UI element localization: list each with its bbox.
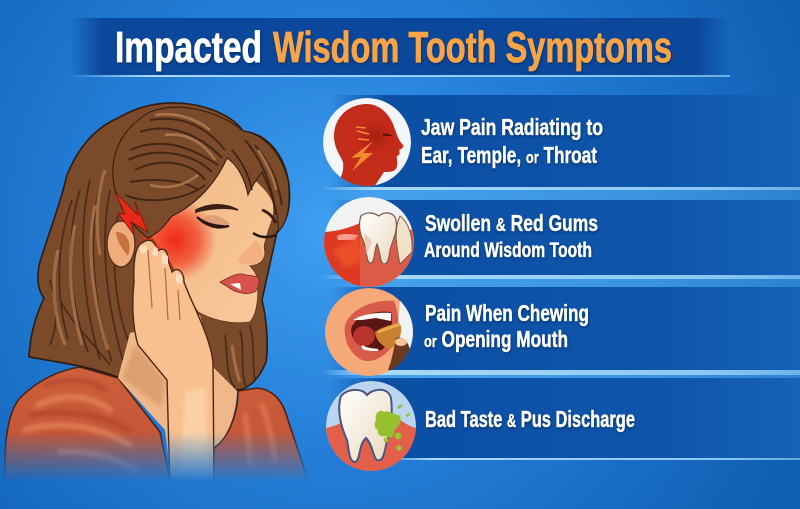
shirt folds <box>25 380 275 470</box>
symptom 1 text <box>421 114 603 168</box>
shirt <box>5 367 308 490</box>
hair highlights <box>54 170 240 382</box>
hair strands <box>50 180 255 388</box>
icon: head with radiating jaw pain <box>323 98 411 190</box>
icon: swollen red gums <box>322 197 415 290</box>
symptom 2 <box>322 197 598 290</box>
eyelid <box>200 215 230 226</box>
symptom 3 text: Pain When Chewing <box>425 300 589 326</box>
nose <box>238 240 263 265</box>
ear inner <box>116 232 130 256</box>
wrist highlight <box>182 388 208 464</box>
neck shadow <box>122 345 165 408</box>
lips <box>220 274 259 294</box>
symptom 2 text <box>424 210 598 262</box>
icon: tooth with pus <box>326 381 417 475</box>
title banner <box>70 18 730 77</box>
symptom 1 text: Ear, Temple, or Throat <box>421 142 597 168</box>
symptom 1 <box>323 98 603 190</box>
symptom 3 text: or Opening Mouth <box>424 326 568 352</box>
teeth <box>230 283 241 290</box>
lightning bolt <box>115 192 148 235</box>
symptom 4 <box>326 381 635 475</box>
finger lines <box>148 250 180 320</box>
front hair sweep <box>113 107 289 238</box>
right eyebrow <box>262 210 276 223</box>
symptom 1 text: Jaw Pain Radiating to <box>421 114 603 140</box>
fingernails <box>140 245 182 285</box>
left eyebrow <box>196 205 238 212</box>
symptom 2 text: Swollen & Red Gums <box>425 210 598 236</box>
ear <box>107 221 135 267</box>
title accent: Wisdom Tooth Symptoms <box>273 23 672 72</box>
pain glow on cheek <box>134 204 216 279</box>
left eye <box>197 217 229 228</box>
hand <box>133 240 214 490</box>
title: Impacted <box>115 23 262 72</box>
right eye <box>253 233 276 237</box>
back hair <box>29 103 290 390</box>
symptom 3 <box>325 288 589 376</box>
neck <box>118 315 237 460</box>
icon: open mouth chewing <box>325 288 420 376</box>
symptom 4 text: Bad Taste & Pus Discharge <box>425 406 635 432</box>
hair shine <box>150 114 276 190</box>
symptom 2 text: Around Wisdom Tooth <box>424 239 592 262</box>
face <box>150 158 274 323</box>
illustration: woman holding her jaw <box>5 103 308 490</box>
symptom 3 text <box>424 300 589 352</box>
fringe strands <box>125 119 282 215</box>
symptom row bands <box>320 95 800 460</box>
